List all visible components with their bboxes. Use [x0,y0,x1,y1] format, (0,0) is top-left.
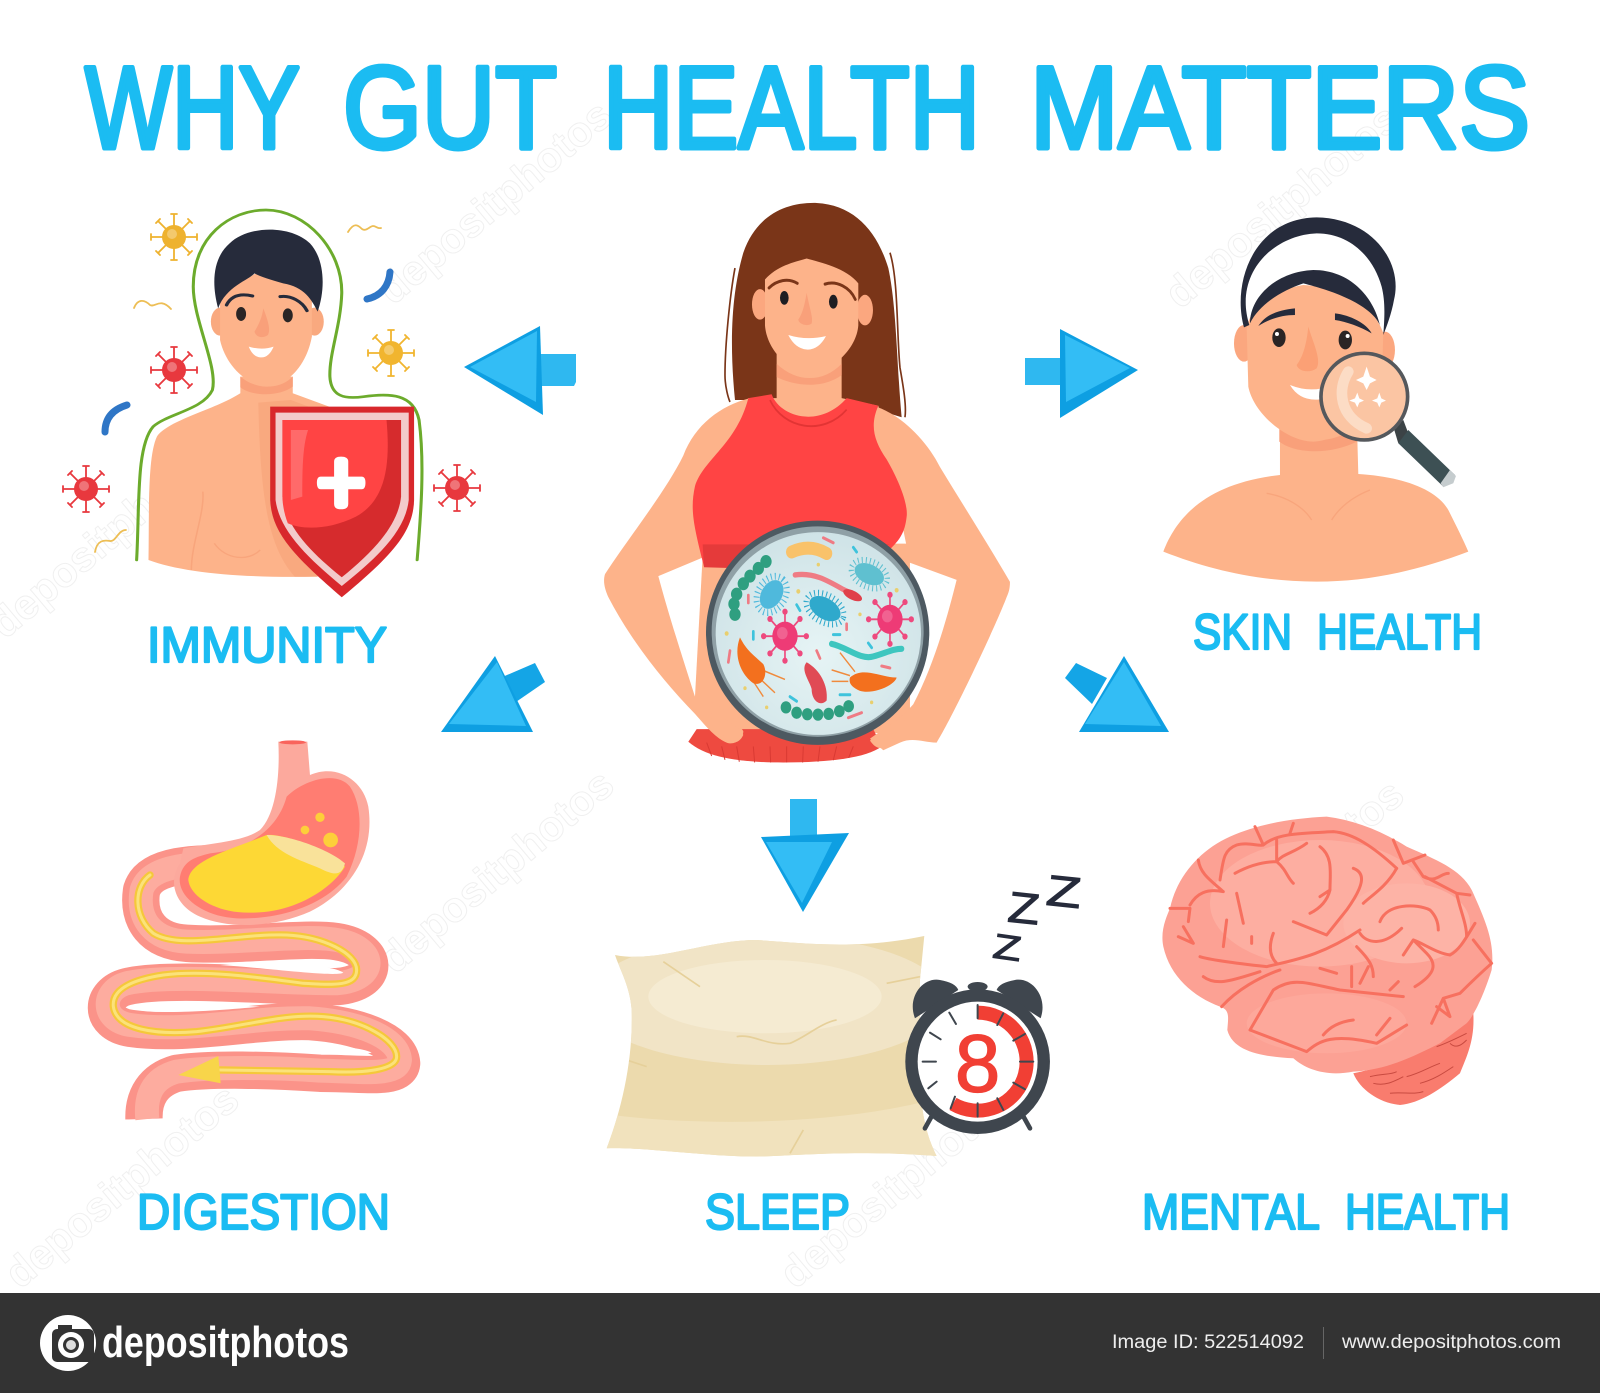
face [1247,285,1383,442]
cerebrum [1162,817,1492,1073]
snoring letters: Z [1044,867,1084,918]
torso [695,544,910,733]
arrow: to mental health [1065,656,1169,732]
sulci [1170,823,1492,1052]
icon: camera logo [40,1315,96,1371]
bubbles [301,813,338,847]
title: HEALTH [603,42,980,173]
label: skin health: SKIN [1193,604,1292,660]
arrow: to digestion [441,656,545,732]
arrow: to sleep [761,799,849,912]
eyebrows and eyes [1258,308,1372,349]
left arm [604,398,750,743]
footer bar [0,1293,1600,1393]
watermarks: depositphotos [0,1075,247,1297]
blue ciliates [750,555,891,631]
watermarks: depositphotos [369,91,620,313]
stomach lining [180,778,360,918]
hand fingers [707,708,910,748]
chyme [188,835,345,913]
nose [1297,327,1318,371]
snoring letters [991,867,1084,969]
title: MATTERS [1030,42,1530,173]
hair [1250,270,1380,325]
image id: Image ID: 522514092 [1112,1332,1304,1353]
watermarks: depositphotos [1156,95,1407,317]
smile [1290,385,1322,400]
intestine gaps [135,964,372,1054]
neck and shoulder base [697,348,900,486]
teal worm [832,644,902,657]
pillow [606,936,936,1157]
neck shadow [240,377,293,394]
clock ticks [923,1005,1033,1117]
watermarks: depositphotos [771,1075,1022,1297]
label: immunity: IMMUNITY [147,617,387,673]
watermarks: depositphotos [1161,770,1412,992]
chest lines [1267,490,1370,520]
hair strands [725,253,905,417]
title: WHY [85,42,300,173]
yellow arrow head [178,1056,221,1083]
man body [148,377,329,577]
footer logo text: depositphotos [102,1318,349,1367]
label: mental health [1142,1184,1510,1240]
label: mental health: HEALTH [1345,1184,1510,1240]
title: GUT [343,42,557,173]
top band [703,544,890,568]
label: sleep: SLEEP [705,1184,850,1240]
arrow: to immunity [464,326,576,415]
highlights [1210,840,1430,967]
petri dish [706,521,929,745]
panel: immunity illustration [137,210,422,597]
aura outline [137,210,422,560]
shoulders [1163,413,1468,582]
intestine tube [106,863,402,1119]
hair [732,203,902,417]
label: skin health: HEALTH [1317,604,1482,660]
icon: viruses [63,214,480,512]
red rod bacterium [804,662,827,703]
snoring letters: Z [1006,884,1042,935]
pink viruses [761,592,914,664]
magnifier [1321,353,1456,487]
top [693,394,907,568]
clock number: 8 [955,1018,1000,1109]
cerebellum [1353,1013,1474,1105]
orange bean [792,548,827,554]
label: skin health [1193,604,1482,660]
panel: sleep illustration [587,867,1084,1163]
label: digestion: DIGESTION [137,1184,390,1240]
pink worm [795,574,852,593]
label: mental health: MENTAL [1142,1184,1320,1240]
esophagus and stomach wall [174,742,369,925]
snoring letters: Z [991,927,1024,969]
skirt [688,729,882,762]
right arm [870,406,1010,750]
alarm clock [905,980,1050,1134]
panel: mental health brain [1162,817,1492,1105]
man head [211,230,324,387]
panel: skin health illustration [1163,217,1468,582]
ears [1234,325,1395,368]
website: www.depositphotos.com [1341,1332,1561,1353]
title [85,42,1530,173]
chest lines [191,492,260,570]
arrow: to skin health [1025,329,1138,418]
neck shadow [1279,427,1357,451]
small dashes [728,538,890,718]
watermarks [0,91,1412,1297]
panel: digestion illustration [106,740,402,1119]
collar line [770,400,847,426]
face [752,258,873,385]
panel: woman with gut microbiome [604,203,1010,762]
arm shading [258,400,318,577]
orange bacteria [737,637,897,697]
green bacteria chains [728,555,854,721]
headband [1241,217,1396,335]
watermarks: depositphotos [371,760,622,982]
yellow digestion path [113,875,397,1072]
8-hour red arc [953,1013,1027,1111]
shield [270,407,414,597]
icon: bacteria squiggles and rods [95,225,390,552]
